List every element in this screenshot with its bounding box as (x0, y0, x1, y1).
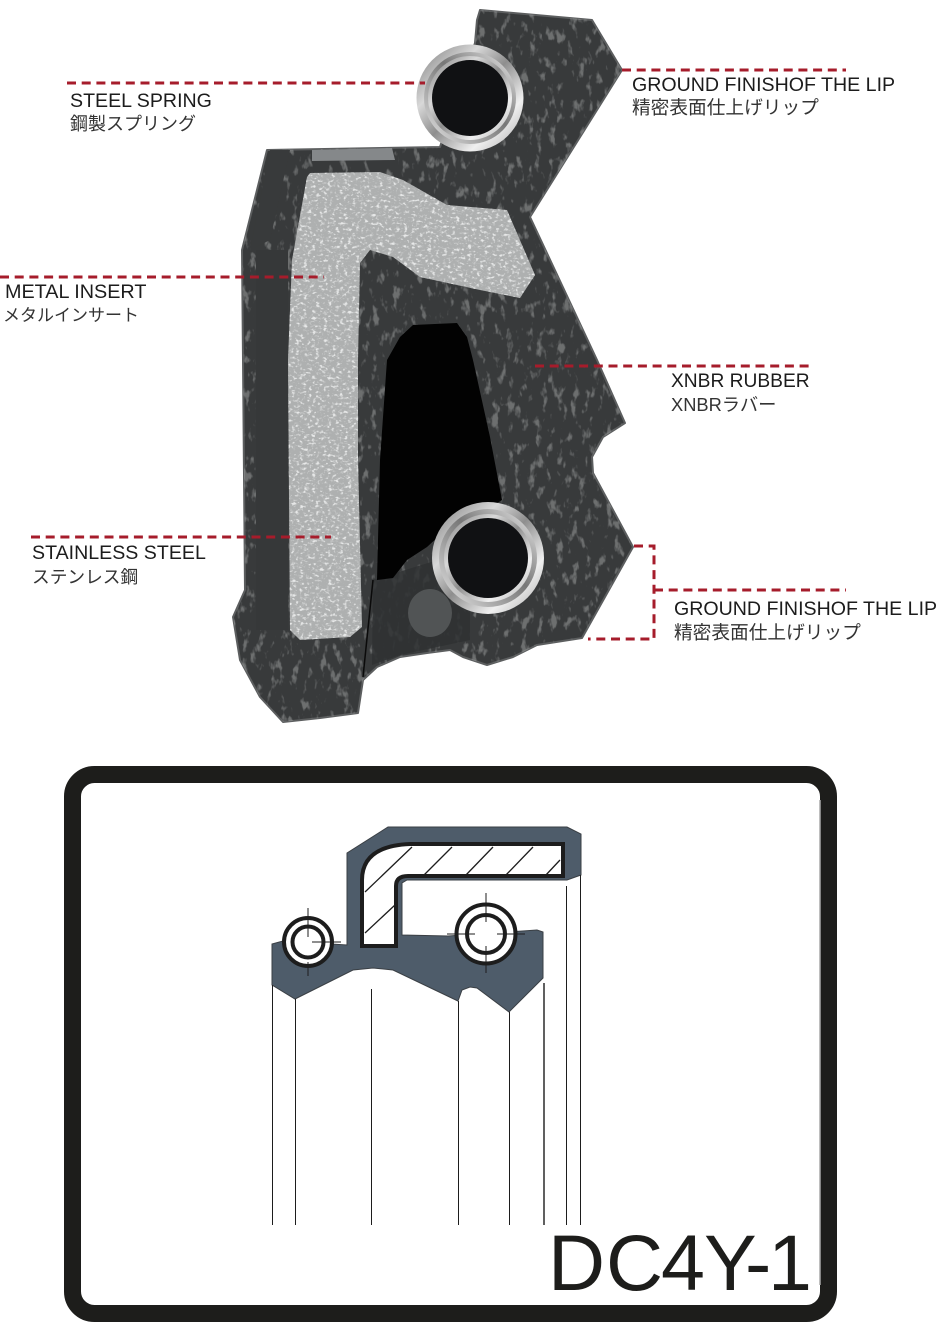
inner cavity (377, 323, 502, 580)
rubber body (230, 5, 633, 725)
spring circle right (447, 893, 525, 973)
label: ground finish top (632, 74, 895, 118)
label: xnbr rubber: XNBRラバー (671, 394, 776, 415)
leader: steel spring (67, 82, 425, 84)
steel spring ring bottom (432, 502, 544, 614)
leader: stainless steel (31, 536, 331, 538)
label: ground finish top: 精密表面仕上げリップ (632, 97, 819, 118)
label: metal insert: メタルインサート (3, 306, 139, 325)
leader: metal insert (0, 276, 324, 278)
label: metal insert: METAL INSERT (5, 281, 146, 303)
leader: ground finish bottom (588, 546, 846, 639)
label: ground finish bottom: 精密表面仕上げリップ (674, 622, 861, 643)
label: steel spring (70, 90, 212, 134)
label: metal insert (3, 281, 146, 325)
label: steel spring: STEEL SPRING (70, 90, 212, 112)
metal insert (285, 170, 540, 645)
leader: xnbr rubber (535, 364, 810, 368)
technical drawing: seal profile (272, 827, 581, 1225)
leader: ground finish top (622, 68, 846, 72)
label: ground finish top: GROUND FINISHOF THE LIP (632, 74, 895, 96)
label: xnbr rubber: XNBR RUBBER (671, 371, 810, 392)
seal section (272, 827, 581, 1012)
seal cross-section illustration (230, 5, 633, 725)
panel: technical drawing frame (72, 774, 828, 1314)
dimension lines (272, 875, 580, 1225)
label: stainless steel (32, 542, 206, 587)
label: ground finish bottom (674, 598, 937, 643)
metal insert section (362, 844, 563, 946)
split line (363, 580, 373, 677)
label: stainless steel: ステンレス鋼 (32, 567, 138, 587)
label: ground finish bottom: GROUND FINISHOF THE LIP (674, 598, 937, 620)
spring circle left (284, 908, 341, 976)
steel spring ring top (416, 44, 524, 152)
label: steel spring: 鋼製スプリング (70, 114, 196, 134)
model name: DC4Y-1 (548, 1218, 812, 1307)
label: xnbr rubber (671, 371, 810, 415)
label: stainless steel: STAINLESS STEEL (32, 542, 206, 564)
